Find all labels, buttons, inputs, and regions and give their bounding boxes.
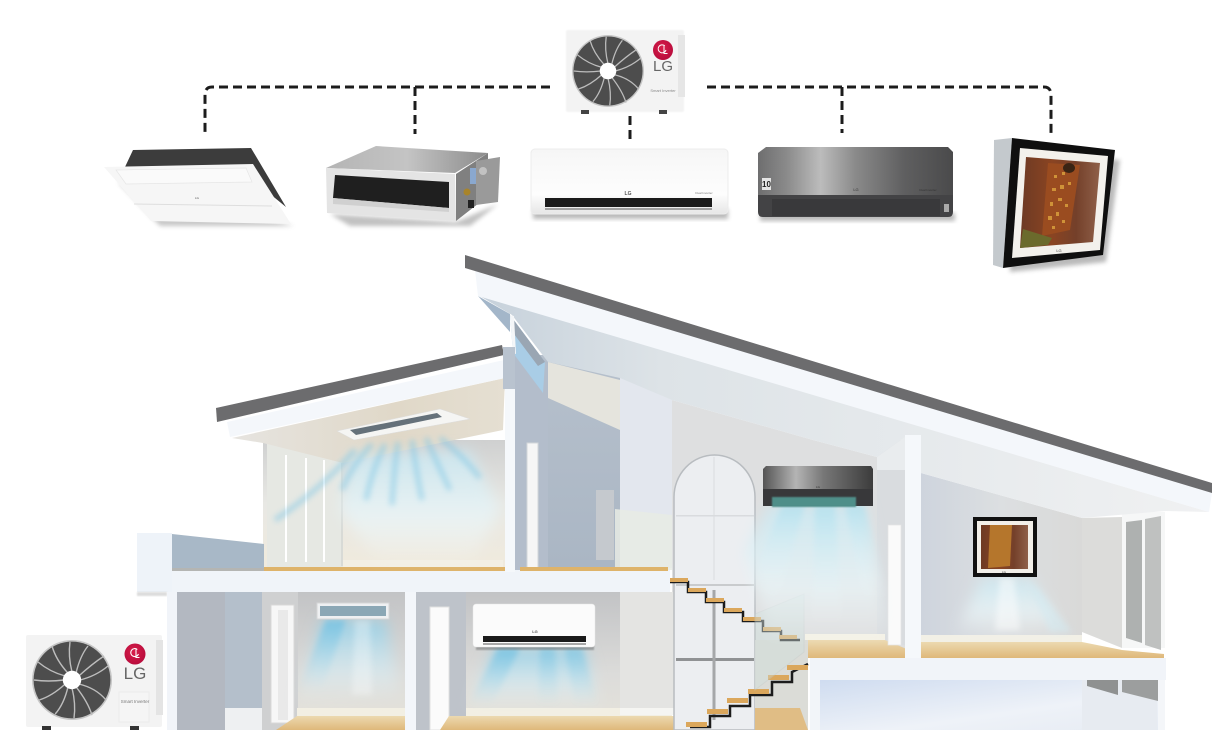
indoor unit: white wall mounted: LG [625,191,632,197]
connection lines: refrigerant piping [205,87,1051,140]
indoor unit in house: ceiling cassette [337,409,470,440]
outdoor unit: bottom left [26,635,163,730]
indoor unit: ceiling cassette [104,148,294,226]
small roof [216,345,515,463]
indoor unit in house: white wall mounted: LG [532,629,538,634]
indoor unit: art cool gallery [993,138,1120,272]
indoor unit in house: art cool gallery [973,517,1037,577]
indoor unit in house: white wall mounted [473,604,595,650]
indoor unit in house: dark wall mounted: LG [816,485,821,489]
indoor unit in house: art cool gallery: LG [1002,570,1007,574]
central column lower [620,592,676,710]
indoor unit: dark wall mounted: LG [853,187,859,192]
indoor unit: white wall mounted: Dual Inverter [695,191,713,195]
pillar: right room divider [905,435,921,658]
indoor unit in house: duct grille [317,603,389,619]
outdoor unit: top [566,30,685,114]
right hall wall [672,400,905,650]
air flow: duct [295,620,400,705]
large roof [465,255,1212,518]
indoor unit: dark wall mounted [758,147,955,221]
indoor unit: art cool gallery: LG [1056,248,1062,253]
right room wall [921,473,1082,645]
lower left rooms [177,592,405,730]
air flow: dark wall unit [745,505,890,640]
stairs lower flight [686,664,808,727]
indoor unit: dark wall mounted: 10 [762,180,771,189]
door: upper hall [888,525,901,645]
arch window and stair wall [615,455,808,730]
outdoor unit: top: Smart Inverter [650,88,676,93]
outdoor unit: bottom left: Smart Inverter [121,699,150,704]
baseboards and floors right [805,640,909,658]
air flow: ceiling cassette [275,438,500,565]
central tall wall [620,378,672,568]
glass balustrade [755,594,804,690]
indoor unit: ceiling cassette: LG [195,196,200,200]
upper middle room [503,345,625,570]
outdoor unit: bottom left: LG [124,664,146,683]
indoor unit in house: dark wall mounted [763,466,873,507]
left parapet and floor slab [137,388,670,730]
house cross-section [137,255,1212,730]
upper left room [263,440,505,568]
indoor unit: ducted [326,146,500,226]
air flow: white wall unit [465,648,600,710]
outdoor unit: top: LG [653,58,673,75]
air flow: art cool unit [955,578,1072,634]
stairs upper flight [670,578,800,640]
lower level right [810,658,1166,680]
indoor unit: dark wall mounted: Dual Inverter [919,188,937,192]
indoor unit: white wall mounted [531,149,728,219]
